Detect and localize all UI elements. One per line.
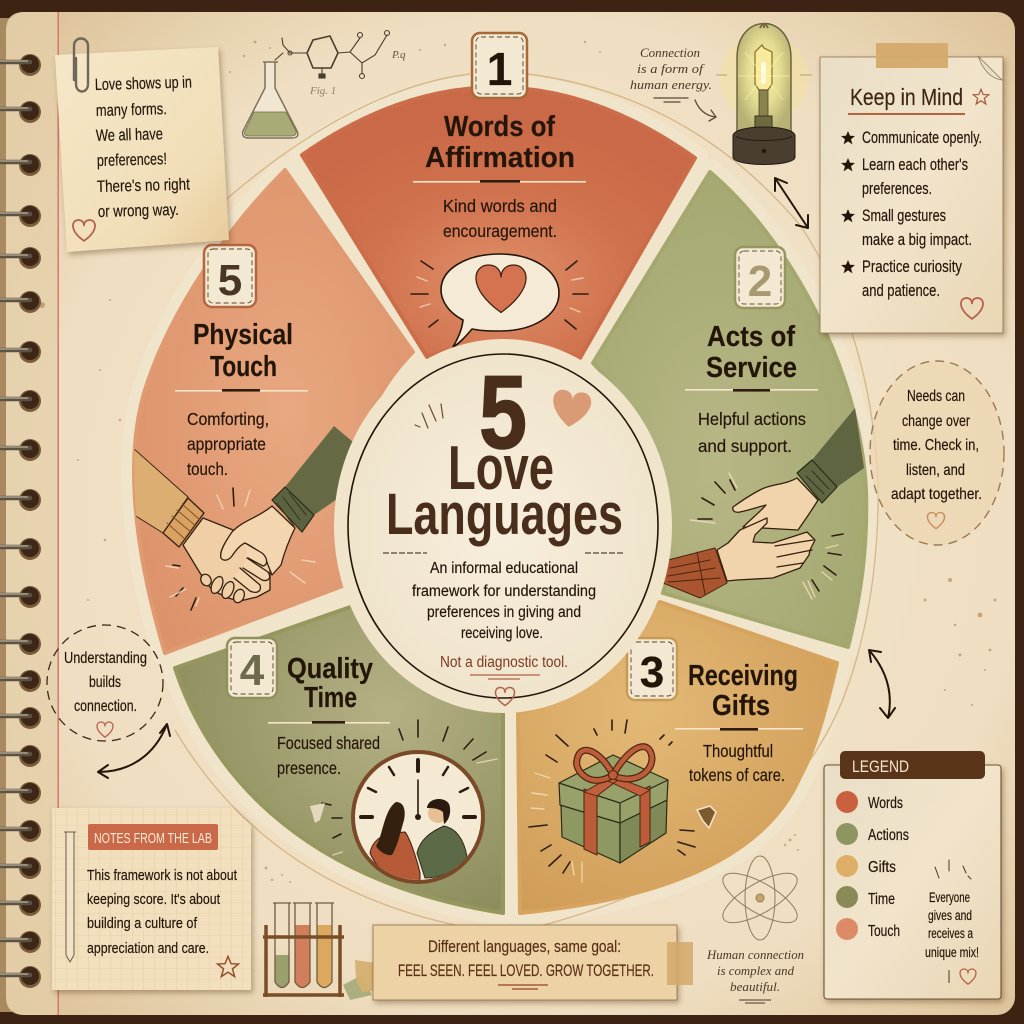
heading underline xyxy=(848,113,965,115)
sticky note text xyxy=(95,73,192,221)
note: needs can change: change over xyxy=(902,413,971,430)
bullet text: Small gestures xyxy=(862,207,946,225)
icon: star xyxy=(973,89,989,104)
central hub xyxy=(334,339,672,713)
note: understanding builds connection: Understanding xyxy=(64,650,147,667)
panel: physical touch xyxy=(131,170,413,653)
legend side note: unique mix! xyxy=(925,945,979,960)
segment shape: gifts xyxy=(518,602,837,913)
page curl xyxy=(978,56,1002,80)
description: words: encouragement. xyxy=(443,221,557,241)
note: connection is a form of human energy: human energy. xyxy=(630,77,712,92)
description: touch: appropriate xyxy=(187,434,266,454)
divider xyxy=(675,728,803,731)
badge 4 xyxy=(227,638,277,698)
hub description: framework for understanding xyxy=(412,583,596,600)
notes body text xyxy=(87,867,238,957)
sticky note text: or wrong way. xyxy=(98,201,179,221)
hub disclaimer: Not a diagnostic tool. xyxy=(440,654,568,671)
legend paper xyxy=(824,765,1001,999)
legend item: words xyxy=(836,791,903,813)
legend item: time: Time xyxy=(868,891,895,908)
note: connection is a form of human energy: Connection xyxy=(640,45,700,60)
tape xyxy=(667,942,693,985)
legend item: gifts: Gifts xyxy=(868,859,896,876)
hub title xyxy=(386,355,623,547)
legend item: touch: Touch xyxy=(868,923,900,940)
divider xyxy=(268,721,390,724)
heading: acts of service: Service xyxy=(706,352,797,384)
icon: flask xyxy=(243,62,298,138)
legend item: words: Words xyxy=(868,795,903,812)
description: touch xyxy=(187,409,269,479)
keep in mind paper xyxy=(820,57,1003,333)
hub heart xyxy=(550,389,592,430)
icon: clock with couple xyxy=(310,720,497,884)
badge 1: 1 xyxy=(487,43,512,95)
heading: physical touch xyxy=(193,319,293,383)
heading: receiving gifts: Receiving xyxy=(688,660,798,692)
badge 5: 5 xyxy=(218,256,242,305)
legend header text: LEGEND xyxy=(852,757,909,776)
note: connection is a form of human energy xyxy=(630,45,712,92)
wheel outer tan arc xyxy=(175,74,878,928)
description: words xyxy=(443,196,557,241)
notes body text: This framework is not about xyxy=(87,867,238,884)
note: needs can change: Needs can xyxy=(907,388,965,405)
spine margin band xyxy=(6,12,58,1015)
icon: heart xyxy=(961,298,983,319)
icon: sticky heart xyxy=(73,220,95,241)
heading: quality time: Quality xyxy=(287,653,373,685)
divider xyxy=(175,389,308,392)
heading: physical touch: Touch xyxy=(210,351,277,383)
note: connection is a form of human energy: is a form of xyxy=(637,61,706,76)
tape scraps xyxy=(343,960,384,1000)
paper speckles xyxy=(39,41,996,883)
bullet text: Practice curiosity xyxy=(862,258,963,276)
spiral binding rings xyxy=(0,54,41,988)
icon: molecule diagram xyxy=(275,30,406,97)
arrow: bulb to keep in mind xyxy=(775,178,808,228)
hub small heart xyxy=(495,688,515,706)
badge 3: 3 xyxy=(640,648,664,697)
heading: acts of service: Acts of xyxy=(707,321,795,353)
bullet text: Learn each other's xyxy=(862,156,968,174)
description: gifts: tokens of care. xyxy=(689,765,785,785)
wheel cream base xyxy=(134,87,866,913)
description: touch: Comforting, xyxy=(187,409,269,429)
icon: molecule diagram: P.q xyxy=(391,49,406,61)
arrow: note to bulb xyxy=(654,98,716,121)
badge 2 xyxy=(735,247,785,308)
heading: receiving gifts xyxy=(688,660,798,722)
segment shape: time xyxy=(175,603,503,913)
icon: pencil test tube xyxy=(64,832,76,962)
banner underline xyxy=(498,985,548,989)
badge 1 xyxy=(472,33,527,98)
badge 5 xyxy=(204,245,256,307)
disclaimer underline xyxy=(470,675,540,679)
panel: words of affirmation xyxy=(302,87,695,358)
bullet text: and patience. xyxy=(862,282,940,300)
description: acts: Helpful actions xyxy=(698,409,806,429)
note: understanding builds connection xyxy=(47,625,163,741)
sticky note text: We all have xyxy=(96,125,163,145)
icon: speech bubble with heart xyxy=(411,254,588,347)
sticky note text: Love shows up in xyxy=(95,73,192,94)
heading: acts of service xyxy=(706,321,797,384)
note: needs can change xyxy=(870,361,1004,545)
notes paper xyxy=(52,808,251,990)
description: time: presence. xyxy=(277,758,341,778)
bullet text: preferences. xyxy=(862,180,932,198)
arrow: wheel to legend xyxy=(869,650,895,718)
icon: paperclip xyxy=(74,38,88,92)
icon: gift box xyxy=(529,720,716,882)
legend header xyxy=(840,751,985,779)
bullet text xyxy=(862,129,982,300)
heading: physical touch: Physical xyxy=(193,319,293,351)
legend item: gifts xyxy=(836,855,896,877)
panel: quality time xyxy=(175,603,503,913)
arrow: connection to notes xyxy=(98,724,170,778)
sticky note text: There's no right xyxy=(97,176,190,196)
note: human connection: is complex and xyxy=(717,963,794,978)
hub description: receiving love. xyxy=(461,625,543,642)
hub description xyxy=(412,560,596,642)
legend item: actions xyxy=(836,823,909,845)
badge 2: 2 xyxy=(748,257,772,306)
description: touch: touch. xyxy=(187,459,228,479)
notes body text: keeping score. It's about xyxy=(87,891,221,908)
segment shape: touch xyxy=(134,170,413,653)
panel: legend xyxy=(824,751,1001,999)
banner: same goal xyxy=(373,925,693,1000)
notes body text: building a culture of xyxy=(87,915,198,932)
tape xyxy=(876,43,948,68)
legend item: actions: Actions xyxy=(868,827,909,844)
note: needs can change: time. Check in, xyxy=(893,437,979,454)
icon: clasped hands xyxy=(131,426,353,610)
segment shape: words xyxy=(302,87,695,358)
icon: test tubes in rack xyxy=(263,903,344,997)
hub sparkle marks xyxy=(415,404,443,428)
hub title: Love xyxy=(448,434,554,503)
legend side note: receives a xyxy=(928,926,973,941)
legend side note: gives and xyxy=(928,908,972,923)
panel: keep in mind xyxy=(820,43,1003,333)
banner text: FEEL SEEN. FEEL LOVED. GROW TOGETHER. xyxy=(398,962,654,980)
legend side note: Everyone xyxy=(929,890,970,905)
under page edge xyxy=(0,18,12,1012)
description: gifts xyxy=(689,741,785,785)
sticky note text: many forms. xyxy=(96,100,167,120)
note: human connection: Human connection xyxy=(706,947,804,962)
description: acts xyxy=(698,409,806,456)
hub title: 5 xyxy=(479,355,527,471)
notes header xyxy=(88,824,218,850)
badge 3 xyxy=(627,638,677,700)
sticky note xyxy=(55,47,229,252)
divider xyxy=(413,180,586,183)
icon: light bulb under glass dome xyxy=(716,23,812,164)
note: needs can change: listen, and xyxy=(906,462,965,479)
heading: quality time xyxy=(287,653,373,714)
legend item: time xyxy=(836,886,895,908)
sticky note text: preferences! xyxy=(97,150,167,170)
segment shape: acts xyxy=(593,172,866,647)
heading: words of affirmation: Words of xyxy=(444,111,555,143)
bullet text: make a big impact. xyxy=(862,231,972,249)
hub title: Languages xyxy=(386,482,623,547)
panel: receiving gifts xyxy=(518,602,837,913)
description: gifts: Thoughtful xyxy=(703,741,773,761)
panel: acts of service xyxy=(593,172,866,647)
description: time xyxy=(277,733,380,778)
note: understanding builds connection: builds xyxy=(89,674,121,691)
note: human connection: beautiful. xyxy=(730,979,780,994)
badge 4: 4 xyxy=(240,646,265,695)
icon: helping hands xyxy=(663,408,864,599)
banner text: Different languages, same goal: xyxy=(428,938,621,956)
icon: star xyxy=(218,956,238,977)
notes header text: NOTES FROM THE LAB xyxy=(94,830,212,847)
divider xyxy=(685,389,818,392)
hub description: An informal educational xyxy=(430,560,578,577)
legend item: touch xyxy=(836,918,900,940)
notes body text: appreciation and care. xyxy=(87,940,209,957)
note: human connection xyxy=(706,947,804,1003)
bullet text: Communicate openly. xyxy=(862,129,982,147)
note: understanding builds connection: connection. xyxy=(74,698,137,715)
hub dashes xyxy=(383,552,623,554)
note: needs can change: adapt together. xyxy=(891,486,982,503)
banner text xyxy=(398,938,654,980)
red margin line xyxy=(58,12,59,1015)
icon: atom xyxy=(716,856,804,940)
hub description: preferences in giving and xyxy=(427,604,581,621)
heading: words of affirmation xyxy=(425,111,575,174)
bullet stars xyxy=(841,131,855,273)
description: time: Focused shared xyxy=(277,733,380,753)
description: acts: and support. xyxy=(698,436,792,456)
heading: words of affirmation: Affirmation xyxy=(425,142,575,174)
panel: notes from the lab xyxy=(52,808,251,990)
heading: quality time: Time xyxy=(304,682,357,714)
keep in mind heading: Keep in Mind xyxy=(850,84,963,110)
icon: molecule diagram: Fig. 1 xyxy=(309,85,336,97)
description: words: Kind words and xyxy=(443,196,557,216)
legend side note xyxy=(925,860,979,984)
heading: receiving gifts: Gifts xyxy=(712,690,770,722)
